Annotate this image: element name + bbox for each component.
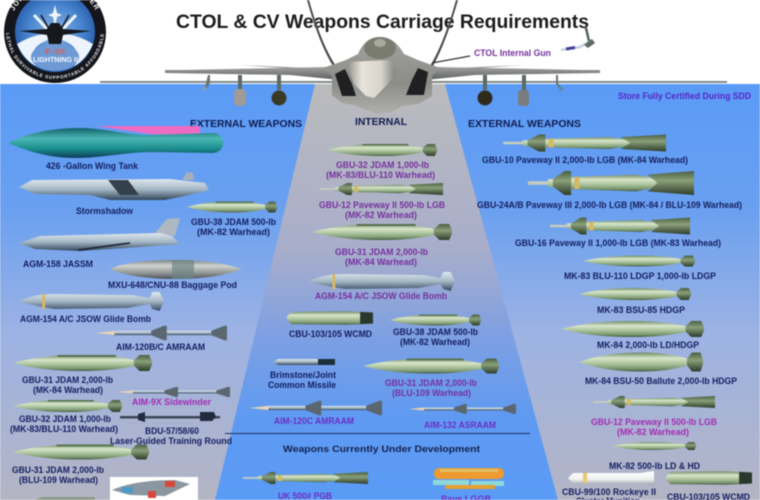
weapon: MK-84: MK-84 2,000-lb LD/HDGP xyxy=(597,340,699,350)
weapon: CBU-99 xyxy=(562,471,656,500)
weapon: GBU-32 left: (MK-83/BLU-110 Warhead) xyxy=(10,424,118,434)
weapon: Stormshadow xyxy=(19,172,209,216)
weapon: AIM-132 xyxy=(409,404,516,430)
weapon: GBU-31 BLU-109 left: (BLU-109 Warhead) xyxy=(19,475,98,485)
weapon: GBU-31 BLU-109 internal xyxy=(363,358,499,398)
weapon: baggage pod: MXU-648/CNU-88 Baggage Pod xyxy=(108,280,237,290)
weapon: AGM-154 internal: AGM-154 A/C JSOW Glide Bomb xyxy=(315,291,447,301)
weapon: GBU-31 MK-84 left: GBU-31 JDAM 2,000-lb xyxy=(22,375,113,385)
weapon: GBU-31 internal: GBU-31 JDAM 2,000-lb xyxy=(335,247,428,257)
gun callout line xyxy=(432,56,470,63)
weapon: baggage pod xyxy=(108,260,242,290)
panel: external weapons left xyxy=(8,126,277,500)
label: CTOL internal gun: CTOL Internal Gun xyxy=(474,48,551,58)
weapon: GBU-32 internal: GBU-32 JDAM 1,000-lb xyxy=(336,160,429,170)
weapon: GBU-16: GBU-16 Paveway II 1,000-lb LGB (MK-83 Warhead) xyxy=(515,238,721,248)
weapon: GBU-38 left: (MK-82 Warhead) xyxy=(197,227,270,237)
emblem: JSF roundel: F-35 xyxy=(45,49,65,56)
weapon: CBU-103 internal: CBU-103/105 WCMD xyxy=(289,329,372,339)
weapon: AGM-154 left: AGM-154 A/C JSOW Glide Bomb xyxy=(20,314,151,324)
weapon: GBU-31 internal: (MK-84 Warhead) xyxy=(345,257,417,267)
weapon: GBU-16 xyxy=(515,218,721,248)
weapon: MK-83 BLU-110 xyxy=(564,256,716,281)
weapon: GBU-31 internal xyxy=(312,224,452,267)
panel: external weapons right xyxy=(477,134,752,500)
weapon: GBU-32 left: GBU-32 JDAM 1,000-lb xyxy=(19,414,111,424)
weapon: GBU-32 internal: (MK-83/BLU-110 Warhead) xyxy=(326,170,435,180)
weapon: GBU-31 BLU-109 internal: GBU-31 JDAM 2,000-lb xyxy=(385,378,477,388)
weapon: GBU-31 BLU-109 left xyxy=(12,444,149,485)
weapon: wing tank: 426 -Gallon Wing Tank xyxy=(46,161,139,171)
image: weapon cutaway diagram xyxy=(110,477,198,500)
icon: internal gun xyxy=(561,27,595,50)
heading: weapons under development: Weapons Currently Under Development xyxy=(283,444,480,454)
aircraft: F-35 front view xyxy=(165,0,600,114)
weapon: GBU-38 internal: GBU-38 JDAM 500-lb xyxy=(393,327,478,337)
weapon: GBU-31 BLU-109 left: GBU-31 JDAM 2,000-lb xyxy=(12,465,104,475)
section divider: under development xyxy=(225,433,530,434)
weapon: GBU-12 internal: (MK-82 Warhead) xyxy=(345,210,417,220)
emblem: JSF roundel xyxy=(3,0,107,84)
weapon: Pave LGGB xyxy=(433,468,504,500)
weapon: CBU-103 internal xyxy=(287,311,373,339)
weapon: GBU-38 left: GBU-38 JDAM 500-lb xyxy=(191,217,276,227)
emblem: JSF roundel: LIGHTNING II xyxy=(33,57,78,64)
weapon: Brimstone: Common Missile xyxy=(268,380,336,390)
weapon: GBU-24: GBU-24A/B Paveway III 2,000-lb LGB (MK-84 / BLU-109 Warhead) xyxy=(477,200,742,210)
emblem: JSF roundel: LETHAL SURVIVABLE SUPPORTABLE AFFORDABLE xyxy=(5,32,104,80)
weapon: Stormshadow: Stormshadow xyxy=(76,206,134,216)
heading: external right: EXTERNAL WEAPONS xyxy=(468,119,581,130)
note: store certified: Store Fully Certified During SDD xyxy=(618,91,751,101)
weapon: GBU-32 internal xyxy=(326,144,437,180)
weapon: AIM-9X: AIM-9X Sidewinder xyxy=(132,397,211,407)
weapon: MK-84 BSU-50 xyxy=(579,352,737,386)
weapon: GBU-31 BLU-109 internal: (BLU-109 Warhead) xyxy=(392,388,471,398)
weapon: UK 500 PGB xyxy=(243,472,368,500)
weapon: AIM-120B/C xyxy=(96,326,227,352)
weapon: BDU: BDU-57/58/60 xyxy=(145,426,199,436)
weapon: AIM-120B/C: AIM-120B/C AMRAAM xyxy=(116,342,205,352)
weapon: MK-84 BSU-50: MK-84 BSU-50 Ballute 2,000-lb HDGP xyxy=(585,376,737,386)
weapon: wing tank xyxy=(8,126,223,171)
weapon: GBU-31 MK-84 left xyxy=(13,355,152,395)
weapon: MK-83 BSU-85 xyxy=(579,288,691,315)
weapon: AIM-132: AIM-132 ASRAAM xyxy=(424,420,496,430)
weapon: GBU-12 internal: GBU-12 Paveway II 500-lb LGB xyxy=(319,200,445,210)
weapon: MK-83 BSU-85: MK-83 BSU-85 HDGP xyxy=(597,305,685,315)
weapon: BDU xyxy=(110,412,232,446)
weapon: Brimstone xyxy=(268,359,336,390)
weapon: JASSM xyxy=(19,218,180,269)
weapon: partial bomb bottom xyxy=(35,497,95,500)
weapon: MK-83 BLU-110: MK-83 BLU-110 LDGP 1,000-lb LDGP xyxy=(564,271,716,281)
weapon: AIM-120C: AIM-120C AMRAAM xyxy=(274,416,354,426)
weapon: GBU-12 right: (MK-82 Warhead) xyxy=(617,427,689,437)
weapon: GBU-24 xyxy=(477,171,742,210)
title: CTOL & CV Weapons Carriage Requirements xyxy=(176,12,589,33)
weapon: GBU-31 MK-84 left: (MK-84 Warhead) xyxy=(33,385,103,395)
weapon: Brimstone: Brimstone/Joint xyxy=(270,370,336,380)
weapon: GBU-10 xyxy=(482,134,688,165)
weapon: AGM-154 left xyxy=(19,292,164,324)
weapon: BDU: Laser-Guided Training Round xyxy=(110,436,232,446)
weapon: GBU-38 internal: (MK-82 Warhead) xyxy=(400,337,470,347)
weapon: GBU-38 left xyxy=(187,202,277,237)
weapon: GBU-10: GBU-10 Paveway II 2,000-lb LGB (MK-84 Warhead) xyxy=(482,155,688,165)
weapon: GBU-32 left xyxy=(10,400,122,434)
weapon: MK-84 xyxy=(561,321,704,350)
weapon: CBU-103 right xyxy=(666,471,752,500)
weapon: AIM-9X xyxy=(117,387,230,407)
weapon: AIM-120C xyxy=(250,401,382,426)
weapon: MK-82: MK-82 500-lb LD & HD xyxy=(609,461,700,471)
weapon: CBU-99: CBU-99/100 Rockeye II xyxy=(562,487,656,497)
weapon: GBU-12 right xyxy=(591,396,717,437)
heading: external left: EXTERNAL WEAPONS xyxy=(190,119,302,130)
weapon: AGM-154 internal xyxy=(309,272,455,301)
heading: internal: INTERNAL xyxy=(355,117,407,128)
weapon: MK-82 xyxy=(609,442,700,471)
weapon: JASSM: AGM-158 JASSM xyxy=(23,259,93,269)
weapon: GBU-38 internal xyxy=(390,314,481,347)
weapon: GBU-12 right: GBU-12 Paveway II 500-lb LGB xyxy=(591,417,717,427)
weapon: GBU-12 internal xyxy=(319,183,445,220)
panel: internal weapons xyxy=(250,144,516,430)
